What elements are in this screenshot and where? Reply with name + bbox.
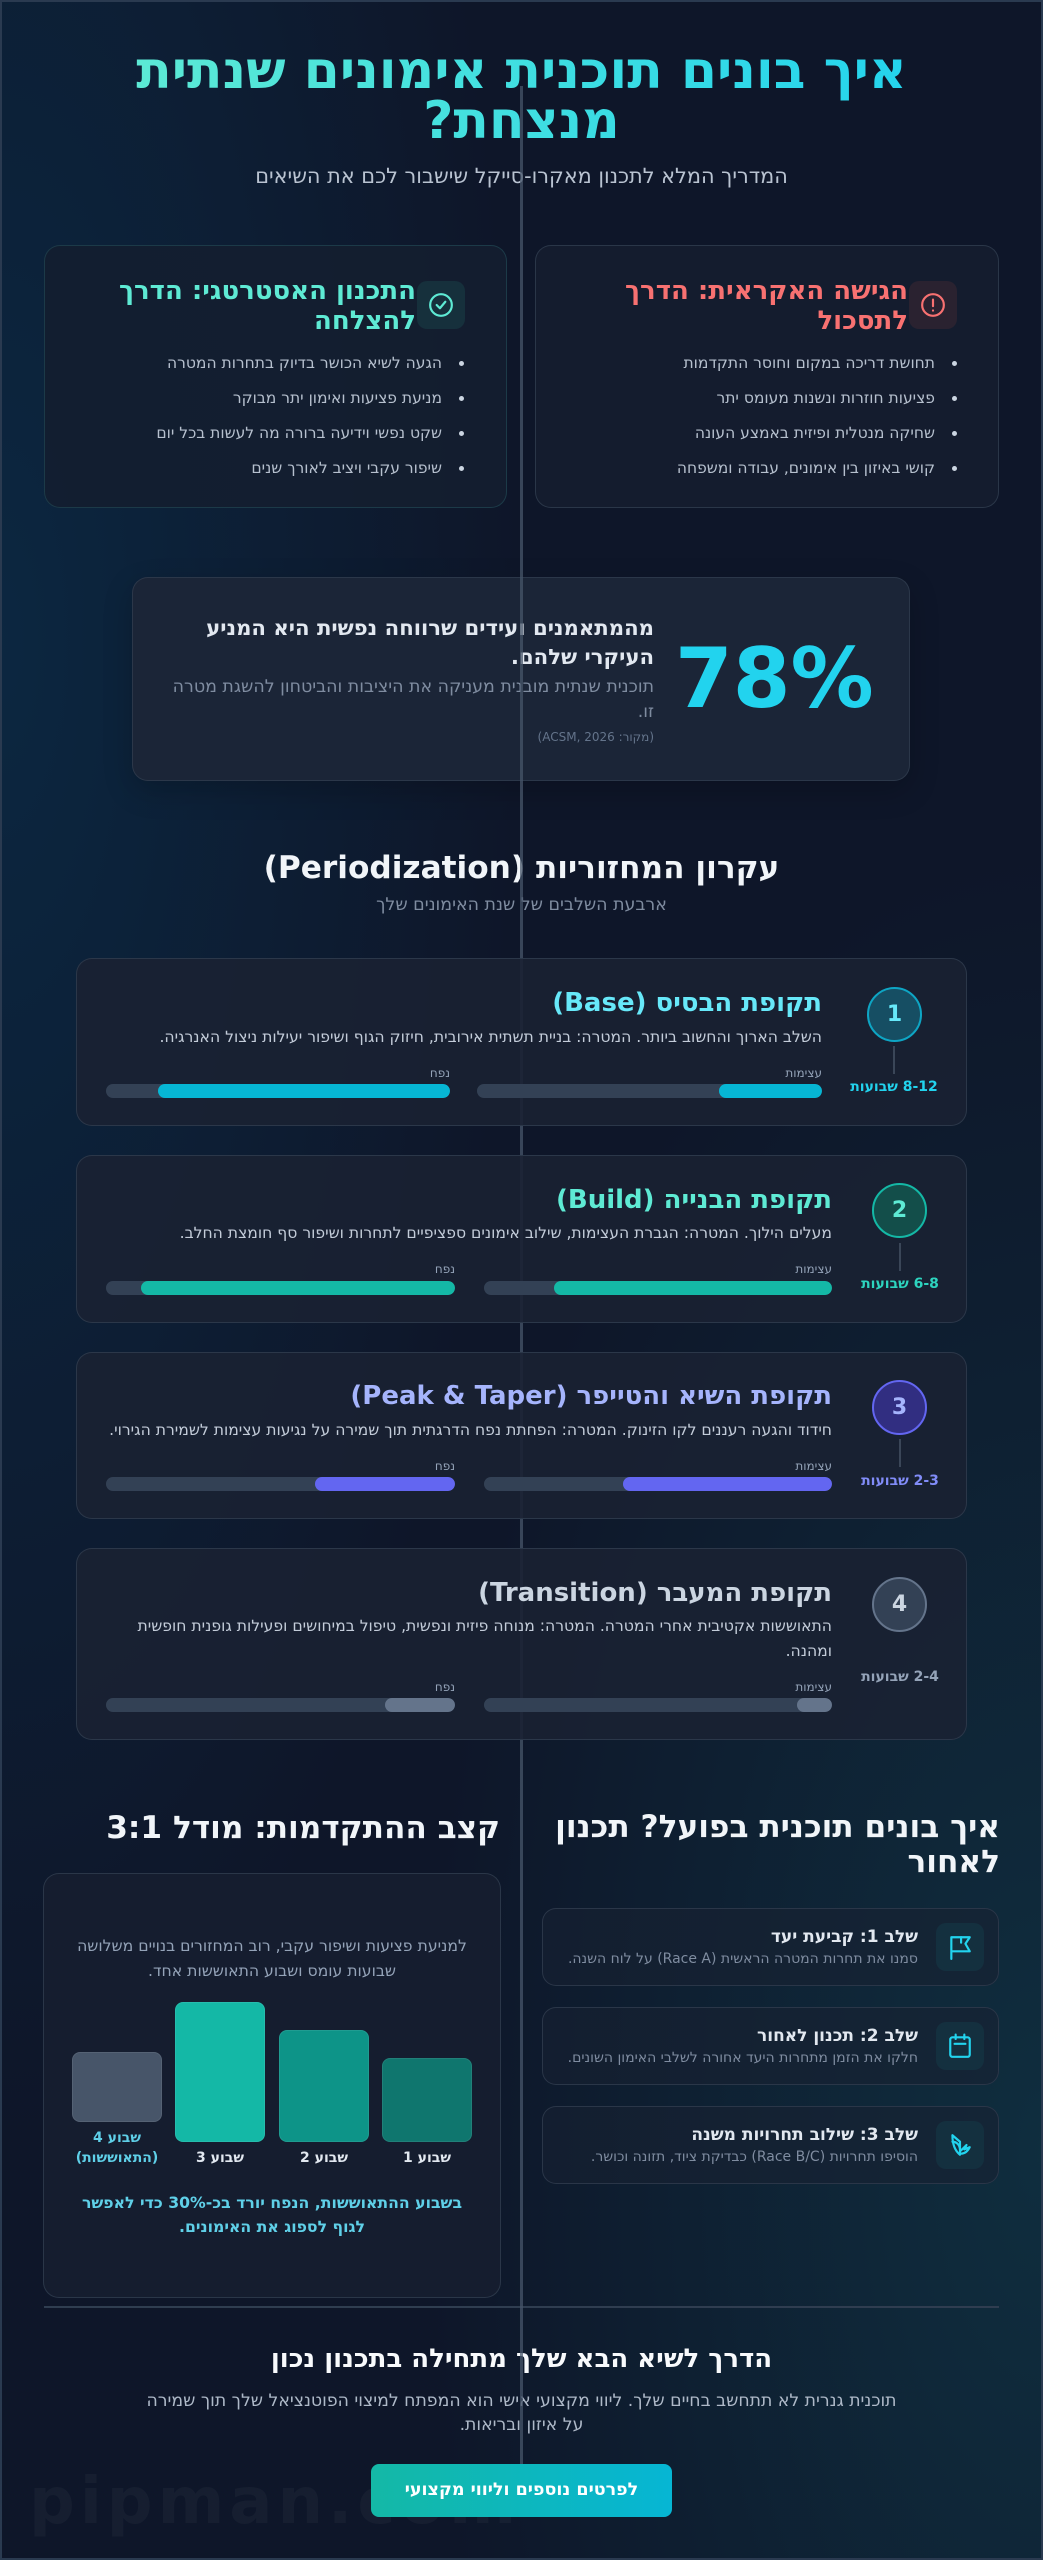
phase description 4: ומהנה. bbox=[786, 1642, 832, 1660]
phase description 4: התאוששות אקטיבית אחרי המטרה. המטרה: מנוחה פיזית ונפשית, טיפול במיחושים ופעילות גופנית חופשית bbox=[138, 1617, 832, 1635]
icon: alert bbox=[909, 281, 957, 329]
stat text: מהמתאמנים ועידים שרווחה נפשית היא המניע bbox=[206, 615, 654, 640]
step description 3: הוסיפו תחרויות (Race B/C) כבדיקת ציוד, תזונה וכושר. bbox=[591, 2149, 918, 2165]
bar labels 1: עצימות bbox=[785, 1066, 822, 1080]
list: random approach: תחושת דריכה במקום וחוסר התקדמות bbox=[684, 354, 935, 372]
intensity bar 3 bbox=[484, 1477, 832, 1491]
phase title 3: תקופת השיא והטייפר (Peak & Taper) bbox=[350, 1381, 832, 1411]
title bbox=[0, 46, 1043, 146]
heading: random approach: הגישה האקראית: הדרך bbox=[625, 276, 908, 306]
panel: phase 3 peak and taper: נפח bbox=[435, 1459, 455, 1473]
model note bbox=[82, 2193, 462, 2236]
duration 4: 2-4 שבועות bbox=[861, 1669, 939, 1685]
panel: phase 1 base: נפח bbox=[430, 1066, 450, 1080]
title: איך בונים תוכנית אימונים שנתית bbox=[136, 41, 907, 101]
bar chart: שבוע 1 bbox=[403, 2150, 451, 2166]
stat number: 78% bbox=[675, 630, 874, 727]
list: strategic planning: הגעה לשיא הכושר בדיוק בתחרות המטרה bbox=[167, 354, 442, 372]
phase title 2: תקופת הבנייה (Build) bbox=[556, 1185, 832, 1215]
volume bar 2 bbox=[106, 1281, 455, 1295]
volume bar 3 bbox=[106, 1477, 455, 1491]
panel: random approach bbox=[535, 245, 999, 508]
footer text bbox=[146, 2391, 897, 2435]
subtitle: המדריך המלא לתכנון מאקרו-סייקל שישבור לכם את השיאים bbox=[255, 164, 788, 188]
heading: strategic planning bbox=[119, 276, 416, 336]
step description 1: סמנו את תחרות המטרה הראשית (Race A) על לוח השנה. bbox=[568, 1951, 918, 1967]
step number 2 bbox=[872, 1183, 927, 1238]
step title 3: שלב 3: שילוב תחרויות משנה bbox=[691, 2125, 918, 2145]
step number 2: 2 bbox=[892, 1198, 907, 1223]
step number 3 bbox=[872, 1380, 927, 1435]
volume bar 4 bbox=[106, 1698, 455, 1712]
panel: phase 4 transition: נפח bbox=[435, 1680, 455, 1694]
step number 4: 4 bbox=[892, 1592, 907, 1617]
step number 1: 1 bbox=[887, 1002, 902, 1027]
heading: periodization: עקרון המחזוריות (Periodization) bbox=[264, 850, 779, 886]
duration 2: 6-8 שבועות bbox=[861, 1276, 939, 1292]
stat text: (מקור: ACSM, 2026) bbox=[538, 730, 654, 744]
model description bbox=[77, 1936, 467, 1980]
panel: statistic bbox=[132, 577, 910, 781]
list: random approach: קושי באיזון בין אימונים, עבודה ומשפחה bbox=[677, 459, 935, 477]
bar chart: שבוע 3 bbox=[196, 2150, 244, 2166]
panel: phase 4 transition bbox=[76, 1548, 967, 1740]
step 1 goal bbox=[542, 1908, 999, 1986]
stat text: זו. bbox=[638, 702, 654, 722]
button: לפרטים נוספים וליווי מקצועי bbox=[405, 2480, 638, 2500]
list: random approach: פציעות חוזרות ונשנות מעומס יתר bbox=[716, 389, 935, 407]
heading: random approach bbox=[625, 276, 908, 336]
step number 3: 3 bbox=[892, 1395, 907, 1420]
panel: strategic planning bbox=[44, 245, 507, 508]
bar labels 2: עצימות bbox=[795, 1262, 832, 1276]
stat text: העיקרי שלהם. bbox=[511, 644, 654, 669]
list: random approach: שחיקה מנטלית ופיזית באמצע העונה bbox=[695, 424, 935, 442]
list: strategic planning bbox=[156, 354, 464, 477]
phase description 1: השלב הארוך והחשוב ביותר. המטרה: בניית תשתית אירובית, חיזוק הגוף ושיפור יעילות ניצול האנרגיה. bbox=[159, 1028, 822, 1046]
icon: calendar bbox=[936, 2022, 984, 2070]
panel: 3:1 model bbox=[43, 1873, 501, 2298]
stat text bbox=[173, 615, 654, 744]
heading: strategic planning: התכנון האסטרטגי: הדרך bbox=[119, 276, 416, 306]
duration 1: 8-12 שבועות bbox=[850, 1079, 938, 1095]
panel: phase 1 base bbox=[76, 958, 967, 1126]
stat text: תוכנית שנתית מובנית מעניקה את היציבות והביטחון להשגת מטרה bbox=[173, 677, 654, 697]
step title 2: שלב 2: תכנון לאחור bbox=[757, 2026, 918, 2046]
step title 1: שלב 1: קביעת יעד bbox=[771, 1927, 918, 1947]
list: random approach bbox=[677, 354, 957, 477]
heading: random approach: לתסכול bbox=[817, 306, 908, 336]
bar chart: שבוע 2 bbox=[300, 2150, 348, 2166]
list: strategic planning: שיפור עקבי ויציב לאורך שנים bbox=[251, 459, 442, 477]
title: מנצחת? bbox=[423, 91, 620, 151]
step number 1 bbox=[867, 987, 922, 1042]
model note: בשבוע ההתאוששות, הנפח יורד בכ-30% כדי לאפשר bbox=[82, 2193, 462, 2212]
heading: strategic planning: להצלחה bbox=[314, 306, 416, 336]
model description: שבועות עומס ושבוע התאוששות אחד. bbox=[148, 1961, 396, 1980]
list: strategic planning: מניעת פציעות ואימון יתר מבוקר bbox=[233, 389, 442, 407]
phase description 3: חידוד והגעה רעננים לקו הזינוק. המטרה: הפחתת נפח הדרגתית תוך שמירה על נגיעות עצימות לשמירת הגירוי. bbox=[109, 1421, 832, 1439]
icon: leaf bbox=[936, 2121, 984, 2169]
footer heading: הדרך לשיא הבא שלך מתחילה בתכנון נכון bbox=[271, 2344, 772, 2374]
watermark: pipman.com bbox=[29, 2465, 521, 2539]
step 2 backward plan bbox=[542, 2007, 999, 2085]
subheading: periodization: ארבעת השלבים של שנת האימונים שלך bbox=[376, 895, 667, 915]
footer text: תוכנית גנרית לא תתחשב בחיים שלך. ליווי מקצועי אישי הוא המפתח למיצוי הפוטנציאל שלך תוך שמירה bbox=[146, 2391, 897, 2411]
panel: phase 2 build: נפח bbox=[435, 1262, 455, 1276]
list: strategic planning: שקט נפשי וידיעה ברורה מה לעשות בכל יום bbox=[156, 424, 442, 442]
heading: backward planning: לאחור bbox=[908, 1844, 1000, 1880]
duration 3: 2-3 שבועות bbox=[861, 1473, 939, 1489]
phase description 4 bbox=[138, 1617, 832, 1660]
bar labels 3: עצימות bbox=[795, 1459, 832, 1473]
model note: לגוף לספוג את האימונים. bbox=[179, 2217, 365, 2236]
footer text: על איזון ובריאות. bbox=[460, 2415, 583, 2435]
bar chart: (התאוששות) bbox=[76, 2150, 158, 2166]
step number 4 bbox=[872, 1577, 927, 1632]
volume bar 1 bbox=[106, 1084, 450, 1098]
intensity bar 1 bbox=[477, 1084, 822, 1098]
heading: backward planning bbox=[555, 1809, 1000, 1880]
icon: flag bbox=[936, 1923, 984, 1971]
heading: 3:1 model: קצב ההתקדמות: מודל 3:1 bbox=[106, 1810, 500, 1846]
phase description 2: מעלים הילוך. המטרה: הגברת העצימות, שילוב אימונים ספציפיים לתחרות ושיפור סף חומצת החלב. bbox=[180, 1224, 832, 1242]
bar labels 4: עצימות bbox=[795, 1680, 832, 1694]
model description: למניעת פציעות ושיפור עקבי, רוב המחזורים בנויים משלושה bbox=[77, 1936, 467, 1955]
step description 2: חלקו את הזמן מתחרות היעד אחורה לשלבי האימון השונים. bbox=[568, 2050, 918, 2066]
icon: check bbox=[417, 281, 465, 329]
bar chart: שבוע 4 bbox=[93, 2130, 141, 2146]
bar chart bbox=[72, 2002, 472, 2166]
heading: backward planning: איך בונים תוכנית בפועל? תכנון bbox=[555, 1809, 1000, 1845]
intensity bar 4 bbox=[484, 1698, 832, 1712]
button bbox=[371, 2464, 672, 2517]
panel: phase 2 build bbox=[76, 1155, 967, 1323]
phase title 1: תקופת הבסיס (Base) bbox=[552, 988, 822, 1018]
phase title 4: תקופת המעבר (Transition) bbox=[478, 1578, 832, 1608]
intensity bar 2 bbox=[484, 1281, 832, 1295]
step 3 secondary races bbox=[542, 2106, 999, 2184]
panel: phase 3 peak and taper bbox=[76, 1352, 967, 1519]
